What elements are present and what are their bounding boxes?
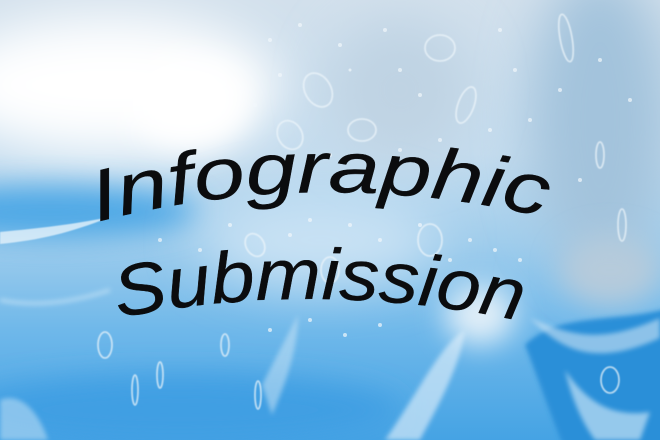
small bubbles (158, 23, 632, 337)
title: Submission: Submission (118, 246, 522, 320)
title: Infographic: Infographic (100, 147, 550, 222)
water droplets (98, 13, 626, 409)
